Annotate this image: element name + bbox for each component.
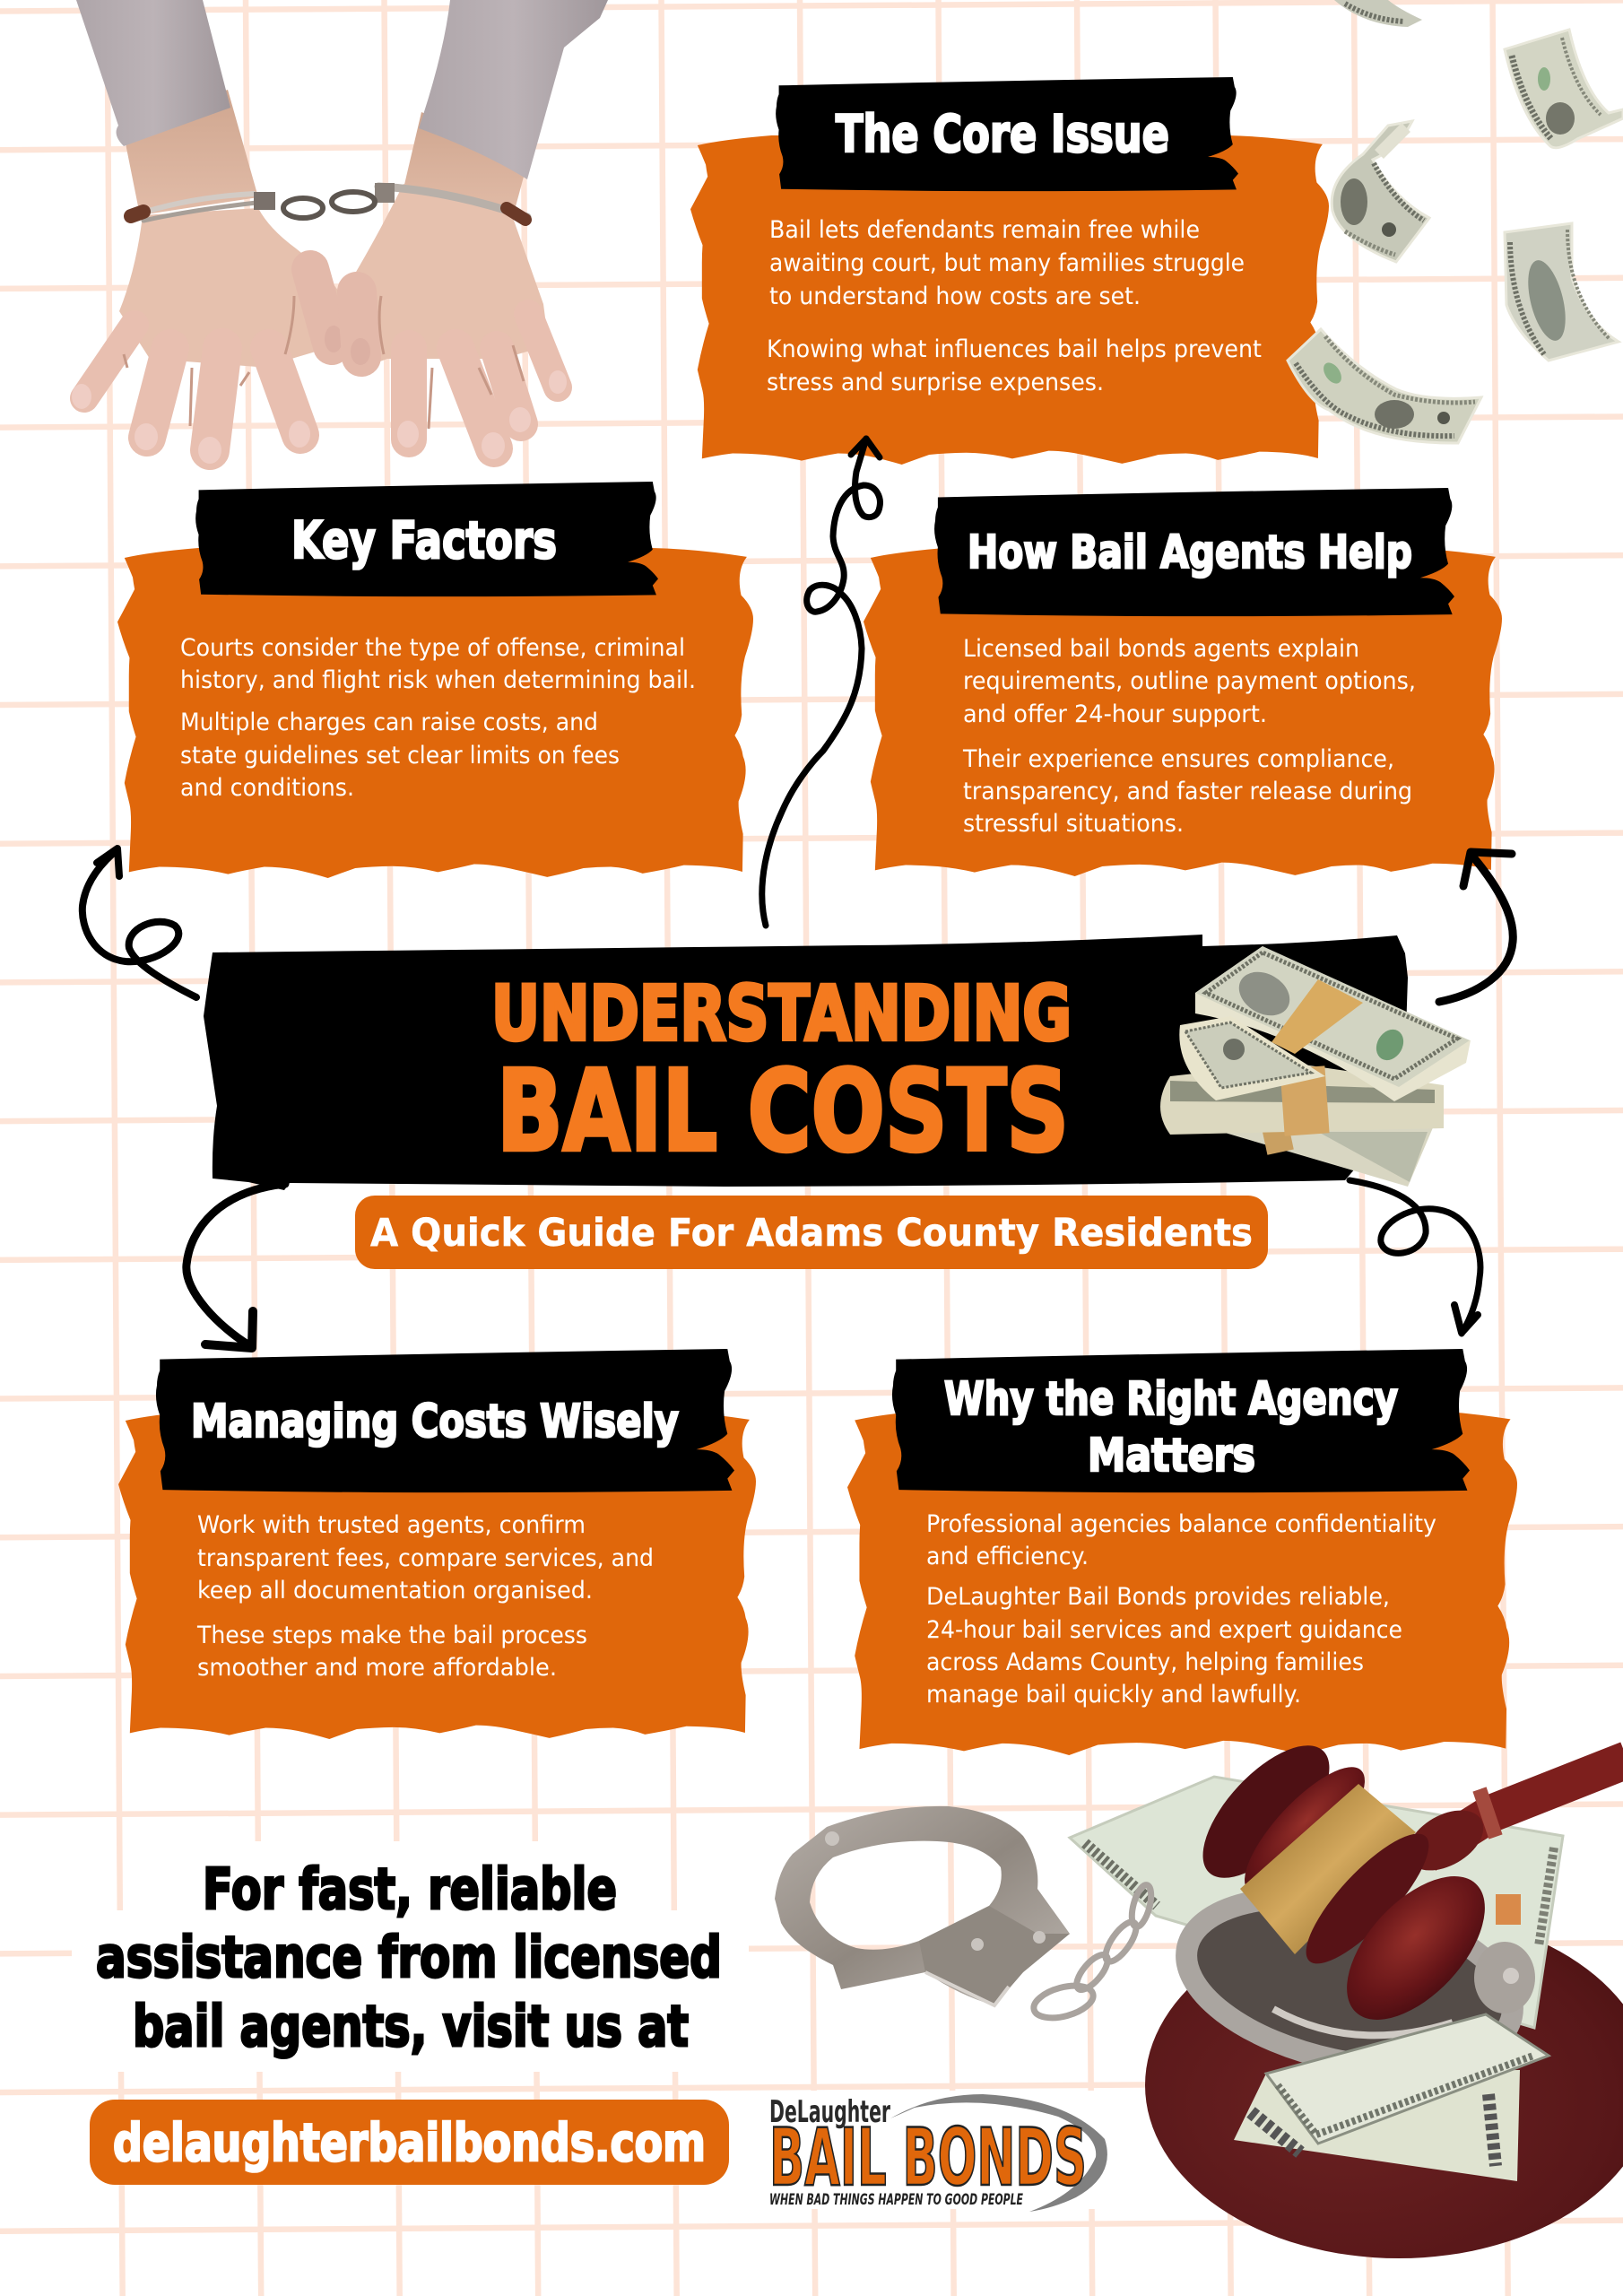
logo: delaughter bail bonds: DeLaughter [769, 2094, 890, 2130]
heading ribbon: key factors: Key Factors [291, 511, 557, 570]
call to action text: bail agents, visit us at [133, 1994, 689, 2059]
heading ribbon: how bail agents help [934, 488, 1454, 616]
dollar bill: top right [1505, 30, 1623, 148]
body text: key factors [180, 634, 696, 802]
body text: how bail agents help: Licensed bail bonds agents explain [963, 635, 1359, 663]
body text: why the right agency matters: across Adams County, helping families [926, 1648, 1364, 1676]
body text: managing costs wisely: keep all documentation organised. [197, 1577, 593, 1605]
heading ribbon: why the right agency matters: Matters [1088, 1430, 1255, 1483]
subtitle pill: A Quick Guide For Adams County Residents [370, 1211, 1253, 1256]
right hand [343, 112, 567, 459]
body text: why the right agency matters: and efficiency. [926, 1543, 1089, 1570]
body text: how bail agents help: Their experience ensures compliance, [962, 745, 1394, 773]
left hand [72, 90, 348, 464]
body text: key factors: and conditions. [180, 774, 354, 802]
body text: key factors: Multiple charges can raise costs, and [180, 709, 598, 736]
body text: how bail agents help: and offer 24-hour support. [963, 700, 1267, 728]
subtitle pill [355, 1196, 1268, 1269]
body text: the core issue: Knowing what influences bail helps prevent [767, 335, 1262, 363]
body text: key factors: history, and flight risk when determining bail. [180, 666, 696, 694]
shirt sleeves [76, 0, 608, 179]
logo: delaughter bail bonds: BAIL BONDS [769, 2111, 1087, 2204]
body text: why the right agency matters: manage bail quickly and lawfully. [926, 1681, 1301, 1709]
body text: how bail agents help: stressful situations. [963, 810, 1184, 838]
body text: why the right agency matters [926, 1510, 1436, 1709]
heading ribbon: managing costs wisely: Managing Costs Wisely [191, 1396, 679, 1448]
dollar bill: top edge [1334, 0, 1422, 27]
open handcuff [775, 1806, 1070, 2005]
call to action text: For fast, reliable [203, 1857, 617, 1922]
arrow: center to why the right agency [1350, 1180, 1480, 1334]
call to action text: assistance from licensed [96, 1925, 722, 1990]
gavel handle [1397, 1760, 1623, 1883]
body text: the core issue: stress and surprise expenses. [767, 369, 1104, 396]
dollar bill: right reverse [1505, 223, 1619, 361]
arrow: center to managing costs [187, 1184, 285, 1348]
panel: how bail agents help [864, 488, 1502, 876]
arrow: center to how bail agents help [1439, 852, 1513, 1002]
body text: managing costs wisely: These steps make the bail process [196, 1622, 587, 1649]
logo: delaughter bail bonds: WHEN BAD THINGS HAPPEN TO GOOD PEOPLE [769, 2191, 1023, 2209]
body text: managing costs wisely: transparent fees, compare services, and [197, 1544, 654, 1572]
dollar bill: curled center [1332, 121, 1429, 262]
website pill [90, 2100, 729, 2185]
heading ribbon: the core issue [776, 77, 1238, 191]
photo: stacks of money [1160, 946, 1471, 1187]
heading ribbon: why the right agency matters [892, 1349, 1470, 1492]
body text: the core issue: to understand how costs are set. [769, 283, 1141, 310]
dollar bill: lower curl [1288, 329, 1481, 443]
body text: the core issue: awaiting court, but many families struggle [769, 249, 1245, 277]
body text: how bail agents help: requirements, outline payment options, [963, 667, 1416, 695]
arrow: center to core issue [762, 439, 880, 926]
body text: managing costs wisely [196, 1511, 654, 1682]
body text: key factors: state guidelines set clear limits on fees [180, 742, 620, 770]
arrow: center to key factors [82, 848, 196, 997]
website pill: delaughterbailbonds.com [113, 2112, 706, 2173]
closed handcuff [1171, 1870, 1535, 2094]
handcuffs [131, 183, 527, 221]
photo: gavel, handcuffs and money [775, 1725, 1623, 2258]
panel: managing costs wisely [118, 1349, 756, 1739]
panel: the core issue [690, 77, 1329, 465]
flying money [1288, 0, 1623, 443]
panel: why the right agency matters [847, 1349, 1517, 1755]
body text: the core issue [767, 216, 1262, 396]
call to action text [96, 1857, 722, 2059]
body text: why the right agency matters: DeLaughter Bail Bonds provides reliable, [926, 1583, 1390, 1611]
handcuff chain [1030, 1883, 1155, 2023]
body text: how bail agents help: transparency, and faster release during [963, 778, 1412, 805]
title text [491, 970, 1072, 1177]
panel: key factors [117, 482, 753, 878]
heading ribbon: why the right agency matters: Why the Right Agency [944, 1373, 1398, 1426]
title text: UNDERSTANDING [491, 970, 1072, 1057]
photo: handcuffed hands [72, 0, 608, 464]
body text: managing costs wisely: Work with trusted agents, confirm [197, 1511, 586, 1539]
body text: key factors: Courts consider the type of offense, criminal [180, 634, 685, 662]
title text: BAIL COSTS [497, 1047, 1069, 1177]
gavel head [1182, 1725, 1510, 2044]
heading ribbon: how bail agents help: How Bail Agents Help [968, 526, 1412, 579]
body text: why the right agency matters: Professional agencies balance confidentiality [926, 1510, 1436, 1538]
body text: the core issue: Bail lets defendants remain free while [769, 216, 1200, 244]
heading ribbon: key factors [195, 482, 658, 596]
heading ribbon: managing costs wisely [156, 1349, 734, 1492]
heading ribbon: the core issue: The Core Issue [836, 105, 1169, 164]
banknotes behind gavel [1070, 1777, 1563, 2028]
body text: managing costs wisely: smoother and more affordable. [197, 1654, 557, 1682]
body text: why the right agency matters: 24-hour bail services and expert guidance [926, 1616, 1402, 1644]
logo: delaughter bail bonds [769, 2094, 1107, 2212]
body text: how bail agents help [962, 635, 1416, 838]
sound block [1145, 1912, 1623, 2258]
title banner [204, 935, 1471, 1190]
front banknotes [1234, 2014, 1549, 2181]
